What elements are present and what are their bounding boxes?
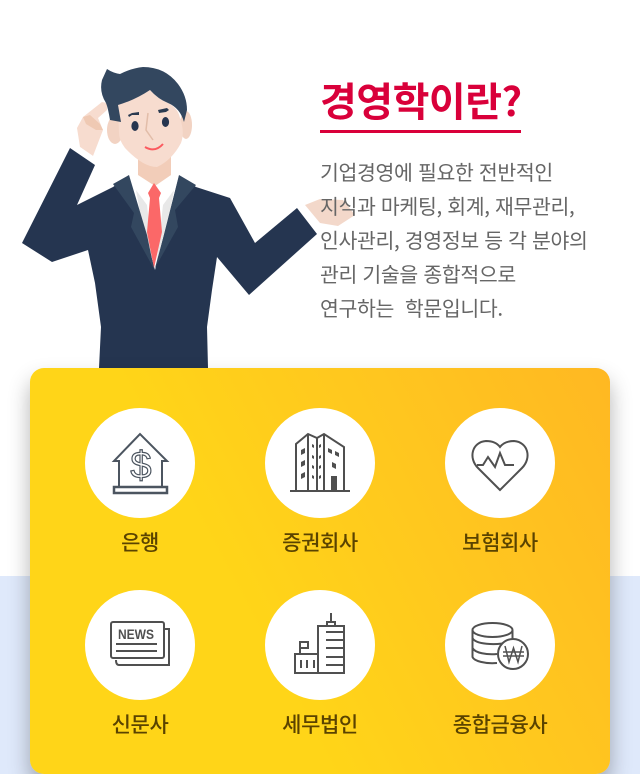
background band	[0, 576, 640, 774]
icon: house with dollar sign: $	[130, 445, 152, 487]
hair	[101, 67, 187, 122]
item: financial services	[445, 590, 555, 739]
raising hand	[70, 102, 107, 165]
label: 보험회사	[462, 527, 538, 557]
label: 증권회사	[282, 527, 358, 557]
icon: news paper	[85, 590, 195, 700]
suit	[22, 148, 317, 368]
item: insurance company	[445, 408, 555, 557]
shirt	[129, 174, 179, 268]
lapels	[113, 175, 154, 269]
description text: 기업경영에 필요한 전반적인 지식과 마케팅, 회계, 재무관리, 인사관리, 경영정보 등 각 분야의 관리 기술을 종합적으로 연구하는 학문입니다.	[320, 156, 588, 322]
label: 종합금융사	[453, 709, 547, 739]
label: 세무법인	[282, 709, 358, 739]
item: securities firm	[265, 408, 375, 557]
neck	[138, 155, 171, 186]
head	[101, 67, 192, 167]
icon: heart with pulse	[445, 408, 555, 518]
label: 은행	[121, 527, 159, 557]
label: 신문사	[112, 709, 168, 739]
icon: news paper: NEWS	[118, 626, 154, 642]
brows	[128, 108, 169, 117]
icon: house with dollar sign	[85, 408, 195, 518]
item: newspaper	[85, 590, 195, 739]
icon: city buildings	[265, 590, 375, 700]
icon: office buildings	[265, 408, 375, 518]
panel: financial and business institutions	[30, 368, 610, 774]
pointing hand	[305, 199, 355, 226]
item: bank	[85, 408, 195, 557]
title underline	[320, 130, 521, 133]
item: tax corporation	[265, 590, 375, 739]
nose	[146, 113, 153, 140]
illustration: businessman pointing	[22, 67, 355, 368]
mouth	[145, 144, 163, 149]
icon: coin stack with won	[445, 590, 555, 700]
tie	[147, 183, 162, 268]
title: 경영학이란?	[320, 70, 522, 128]
eyes	[131, 121, 139, 131]
